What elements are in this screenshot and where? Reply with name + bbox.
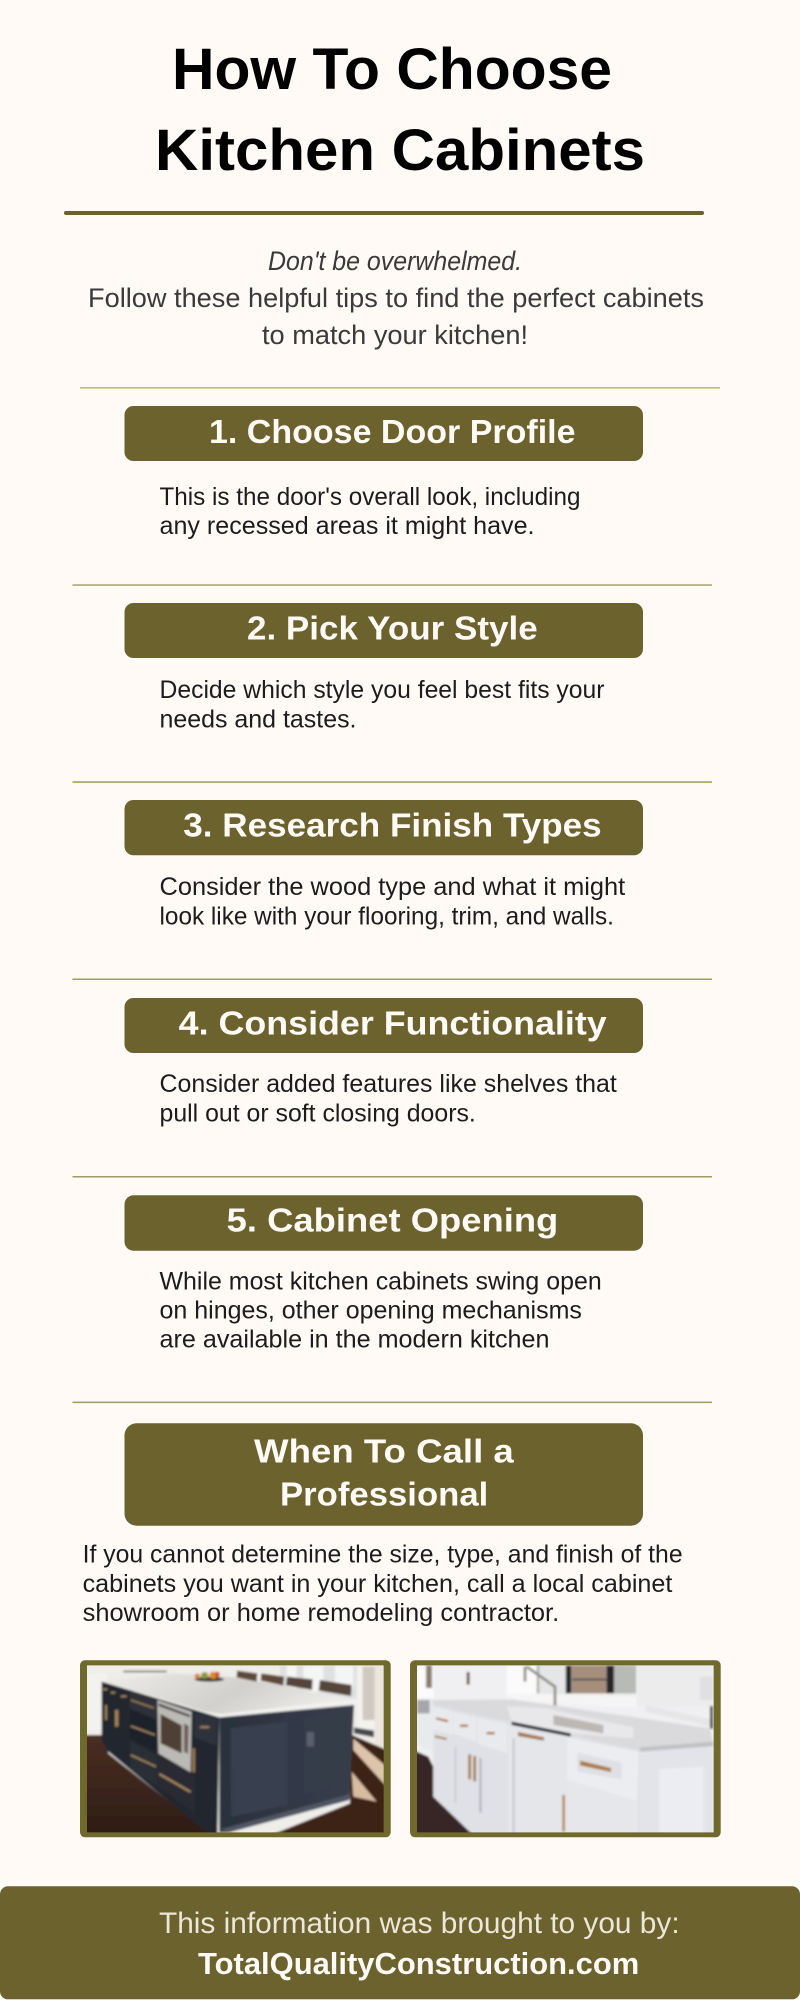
panel: step 4 [124,998,643,1127]
footer banner [0,1886,800,1999]
text: step 5: on hinges, other opening mechanisms [160,1297,582,1325]
text: step 2 [160,676,604,733]
text: step 1: This is the door's overall look, including [160,483,580,511]
text: step 1 [160,483,580,540]
text: step 1: any recessed areas it might have. [160,512,534,540]
text: step 4: pull out or soft closing doors. [160,1099,476,1127]
heading: step 1: 1. Choose Door Profile [209,413,576,450]
heading: when to call: Professional [280,1475,488,1512]
text: step 5: While most kitchen cabinets swing open [160,1268,602,1296]
text: when to call: If you cannot determine the size, type, and finish of the [83,1541,683,1569]
footer banner: This information was brought to you by: [159,1907,680,1940]
panel: step 3 [124,800,643,930]
text: step 2: needs and tastes. [160,705,356,733]
title: Kitchen Cabinets [155,118,645,183]
intro text: Don't be overwhelmed. [268,246,522,276]
heading: step 1 [124,406,643,461]
heading: step 5: 5. Cabinet Opening [227,1202,558,1239]
text: step 3: Consider the wood type and what it might [160,873,625,901]
panel: step 1 [124,406,643,540]
intro text [88,246,704,350]
panel: step 5 [124,1195,643,1354]
heading: step 2: 2. Pick Your Style [247,609,538,646]
panel: when to call a professional [83,1423,683,1627]
text: step 4 [160,1070,617,1127]
heading: when to call [124,1423,643,1526]
intro text: Follow these helpful tips to find the perfect cabinets [88,283,704,313]
text: step 3: look like with your flooring, trim, and walls. [160,902,614,930]
text: when to call [83,1541,683,1627]
photo: navy kitchen island [80,1660,391,1837]
heading: step 5 [124,1195,643,1251]
text: step 2: Decide which style you feel best fits your [160,676,604,704]
text: step 5: are available in the modern kitchen [160,1326,550,1354]
heading: step 4: 4. Consider Functionality [179,1004,607,1041]
heading: step 3 [124,800,643,855]
photo: white shaker cabinets [410,1660,721,1837]
heading: when to call: When To Call a [254,1432,515,1469]
text: step 3 [160,873,625,930]
footer banner: TotalQualityConstruction.com [198,1946,639,1981]
heading: step 2 [124,603,643,658]
text: when to call: cabinets you want in your kitchen, call a local cabinet [83,1570,672,1598]
heading: step 4 [124,998,643,1053]
heading: step 3: 3. Research Finish Types [183,806,602,843]
text: step 5 [160,1268,602,1354]
intro text: to match your kitchen! [262,320,528,350]
text: step 4: Consider added features like shelves that [160,1070,617,1098]
text: when to call: showroom or home remodeling contractor. [83,1599,559,1627]
panel: step 2 [124,603,643,733]
title [155,37,645,183]
title: How To Choose [172,37,612,102]
